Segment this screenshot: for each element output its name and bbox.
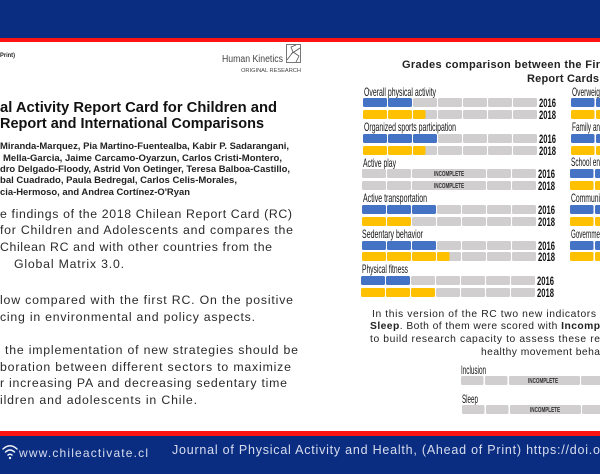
chart: active transportation: 2018 [538,215,555,229]
icon: publisher logo [286,44,300,62]
icon: wifi [3,446,17,459]
chart: sleep: Sleep [462,392,478,406]
chart: active transportation: Active transportation [363,191,427,205]
section label: original research: ORIGINAL RESEARCH [241,68,301,74]
footer band [0,431,600,474]
chart: overall physical activity [363,85,556,122]
new indicators note: In this version of the RC two new indicators [372,309,596,320]
publisher name: Human Kinetics [222,54,283,65]
chart: active play: 2018 [538,179,555,193]
chart: sedentary behavior: Sedentary behavior [362,227,423,241]
chart: active transportation [362,191,555,229]
chart: overall physical activity: Overall physical activity [364,85,436,99]
chart: school environment [570,155,600,190]
chart: overall physical activity: 2016 [539,96,556,110]
chart heading [402,59,600,85]
chart: active play: 2016 [538,167,555,181]
chart: sedentary behavior: 2018 [538,250,555,264]
abstract: results: cing in environmental and policy aspects. [0,310,255,324]
chart: inclusion: Inclusion [461,363,486,377]
chart: active play: INCOMPLETE [434,171,464,178]
chart: organized sports participation [363,120,556,158]
chart: physical fitness: 2018 [537,286,554,300]
abstract: purpose [0,207,293,271]
chart: community [570,191,600,226]
chart: organized sports participation: 2018 [539,144,556,158]
chart: sleep: INCOMPLETE [530,407,560,414]
chart: active play: Active play [363,156,396,170]
chart: active transportation: 2016 [538,203,555,217]
chart: inclusion [461,363,600,385]
abstract: conclusions: boration between different sectors to maximize [0,360,291,374]
chart heading: Grades comparison between the Fir [402,59,600,71]
abstract: results: low compared with the first RC. On the positive [0,293,293,307]
abstract: purpose: Global Matrix 3.0. [14,257,124,271]
chart: sedentary behavior [362,227,555,264]
chart: overall physical activity: 2018 [539,108,556,122]
abstract: purpose: Chilean RC and with other countries from the [0,240,272,254]
chart: government [570,227,600,261]
article title [0,100,277,132]
authors: cia-Hermoso, and Andrea Cortínez-O'Ryan [0,187,190,198]
authors [0,141,290,198]
citation: Journal of Physical Activity and Health, (Ahead of Print) https://doi.o [172,443,600,457]
new indicators note: Sleep. Both of them were scored with Incomp [370,321,600,332]
authors: dro Delgado-Floody, Astrid Von Oetinger, Teresa Balboa-Castillo, [0,164,290,175]
article title: Report and International Comparisons [0,116,264,132]
chart: family and peers [571,120,600,155]
article title: al Activity Report Card for Children and [0,100,277,116]
authors: bal Cuadrado, Paula Bedregal, Carlos Celis-Morales, [0,175,237,186]
abstract: conclusions: the implementation of new strategies should be [5,343,298,357]
new indicators note [370,309,600,358]
abstract: conclusions: r increasing PA and decreasing sedentary time [0,376,287,390]
abstract: purpose: for Children and Adolescents and compares the [0,223,293,237]
chart: physical fitness: 2016 [537,274,554,288]
authors: Mella-Garcia, Jaime Carcamo-Oyarzun, Carlos Cristi-Montero, [3,153,282,164]
chart: sleep [462,392,600,414]
chart: organized sports participation: 2016 [539,132,556,146]
new indicators note: healthy movement beha [481,347,600,358]
abstract: conclusions [0,343,298,407]
new indicators note: to build research capacity to assess these re [370,334,600,345]
abstract: results [0,293,293,324]
chart: active play: INCOMPLETE [434,183,464,190]
abstract: purpose: e findings of the 2018 Chilean Report Card (RC) [0,207,292,221]
authors: Miranda-Marquez, Pia Martino-Fuentealba, Kabir P. Sadarangani, [0,141,289,152]
chart: overweight [571,85,600,119]
chart: organized sports participation: Organized sports participation [364,120,456,134]
website: www.chileactivate.cl [18,446,148,460]
chart: active play [362,156,555,193]
header band [0,0,600,42]
chart: inclusion: INCOMPLETE [528,378,558,385]
chart: sedentary behavior: 2016 [538,239,555,253]
chart heading: Report Cards [527,73,599,85]
journal issue note: Print) [0,52,15,59]
chart: physical fitness: Physical fitness [362,262,408,276]
abstract: conclusions: ildren and adolescents in Chile. [0,393,197,407]
chart: physical fitness [361,262,554,300]
